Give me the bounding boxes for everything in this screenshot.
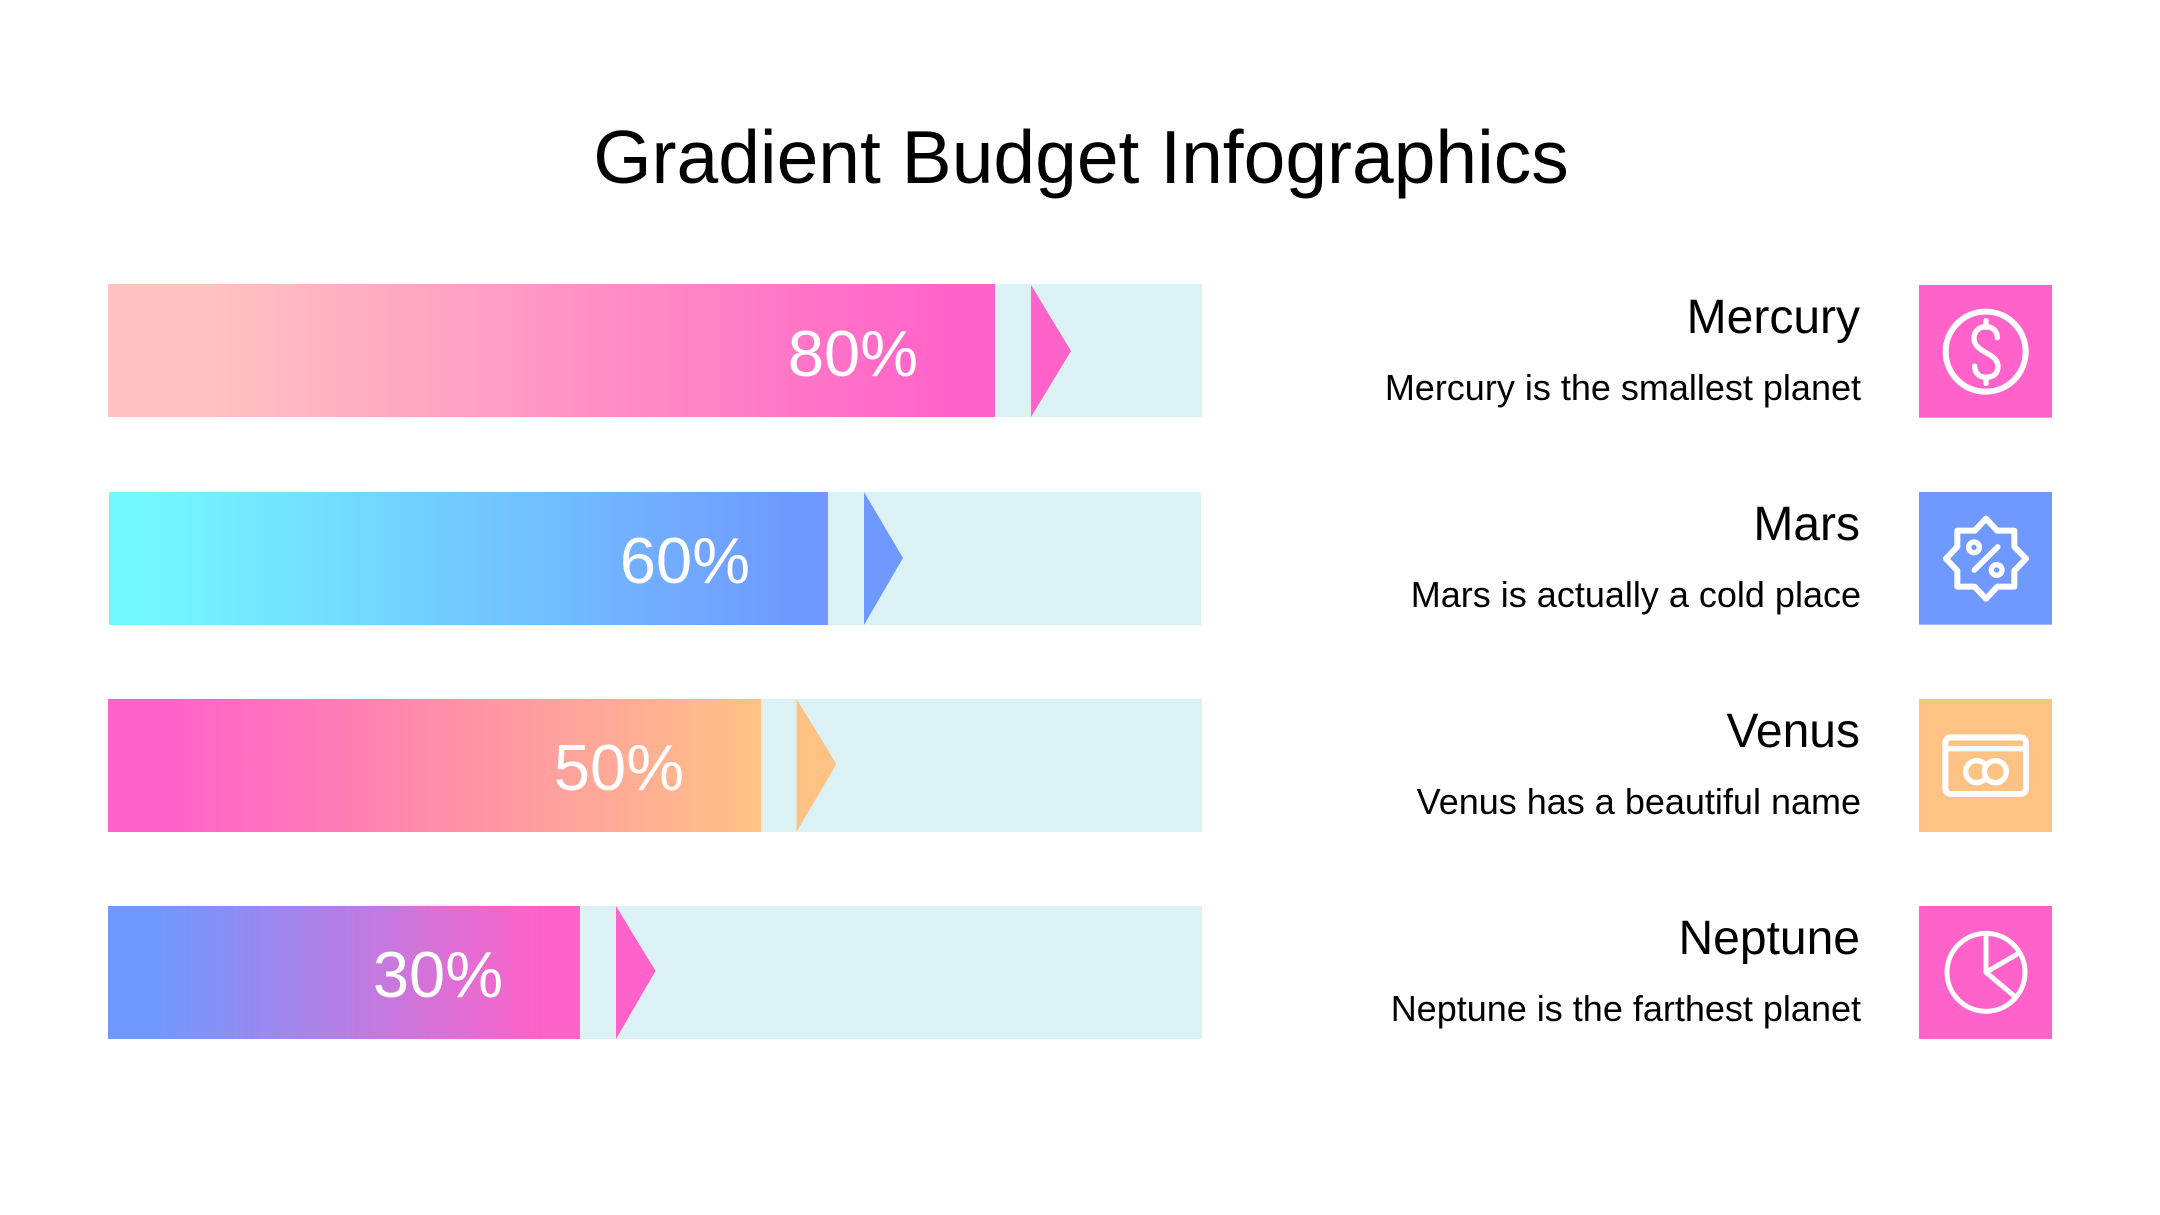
text block: Mercury: Mercury [1687, 291, 1860, 344]
title: Gradient Budget Infographics [593, 115, 1569, 199]
bar: Mercury 80%: 80% [788, 317, 918, 390]
text block: Mercury: Mercury is the smallest planet [1385, 367, 1861, 408]
bar: Neptune 30%: 30% [373, 938, 503, 1011]
icon: percent badge [1919, 492, 2052, 625]
text block: Mars: Mars [1753, 498, 1860, 551]
bar: Venus 50% [108, 699, 1202, 832]
text block: Neptune [1391, 912, 1861, 1029]
bar: Venus 50%: 50% [554, 731, 684, 804]
text block: Neptune: Neptune is the farthest planet [1391, 988, 1861, 1029]
text block: Venus: Venus [1727, 705, 1860, 758]
text block: Mars [1411, 498, 1861, 615]
text block: Neptune: Neptune [1679, 912, 1860, 965]
text block: Venus: Venus has a beautiful name [1417, 781, 1861, 822]
icon: credit card [1919, 699, 2052, 832]
icon: pie chart [1919, 906, 2052, 1039]
bar: Mars 60% [109, 492, 1201, 625]
text block: Mars: Mars is actually a cold place [1411, 574, 1861, 615]
text block: Mercury [1385, 291, 1861, 408]
icon: dollar coin [1919, 285, 2052, 418]
bar: Mercury 80% [108, 284, 1202, 417]
text block: Venus [1417, 705, 1861, 822]
bar: Neptune 30% [108, 906, 1202, 1039]
bar: Mars 60%: 60% [620, 524, 750, 597]
